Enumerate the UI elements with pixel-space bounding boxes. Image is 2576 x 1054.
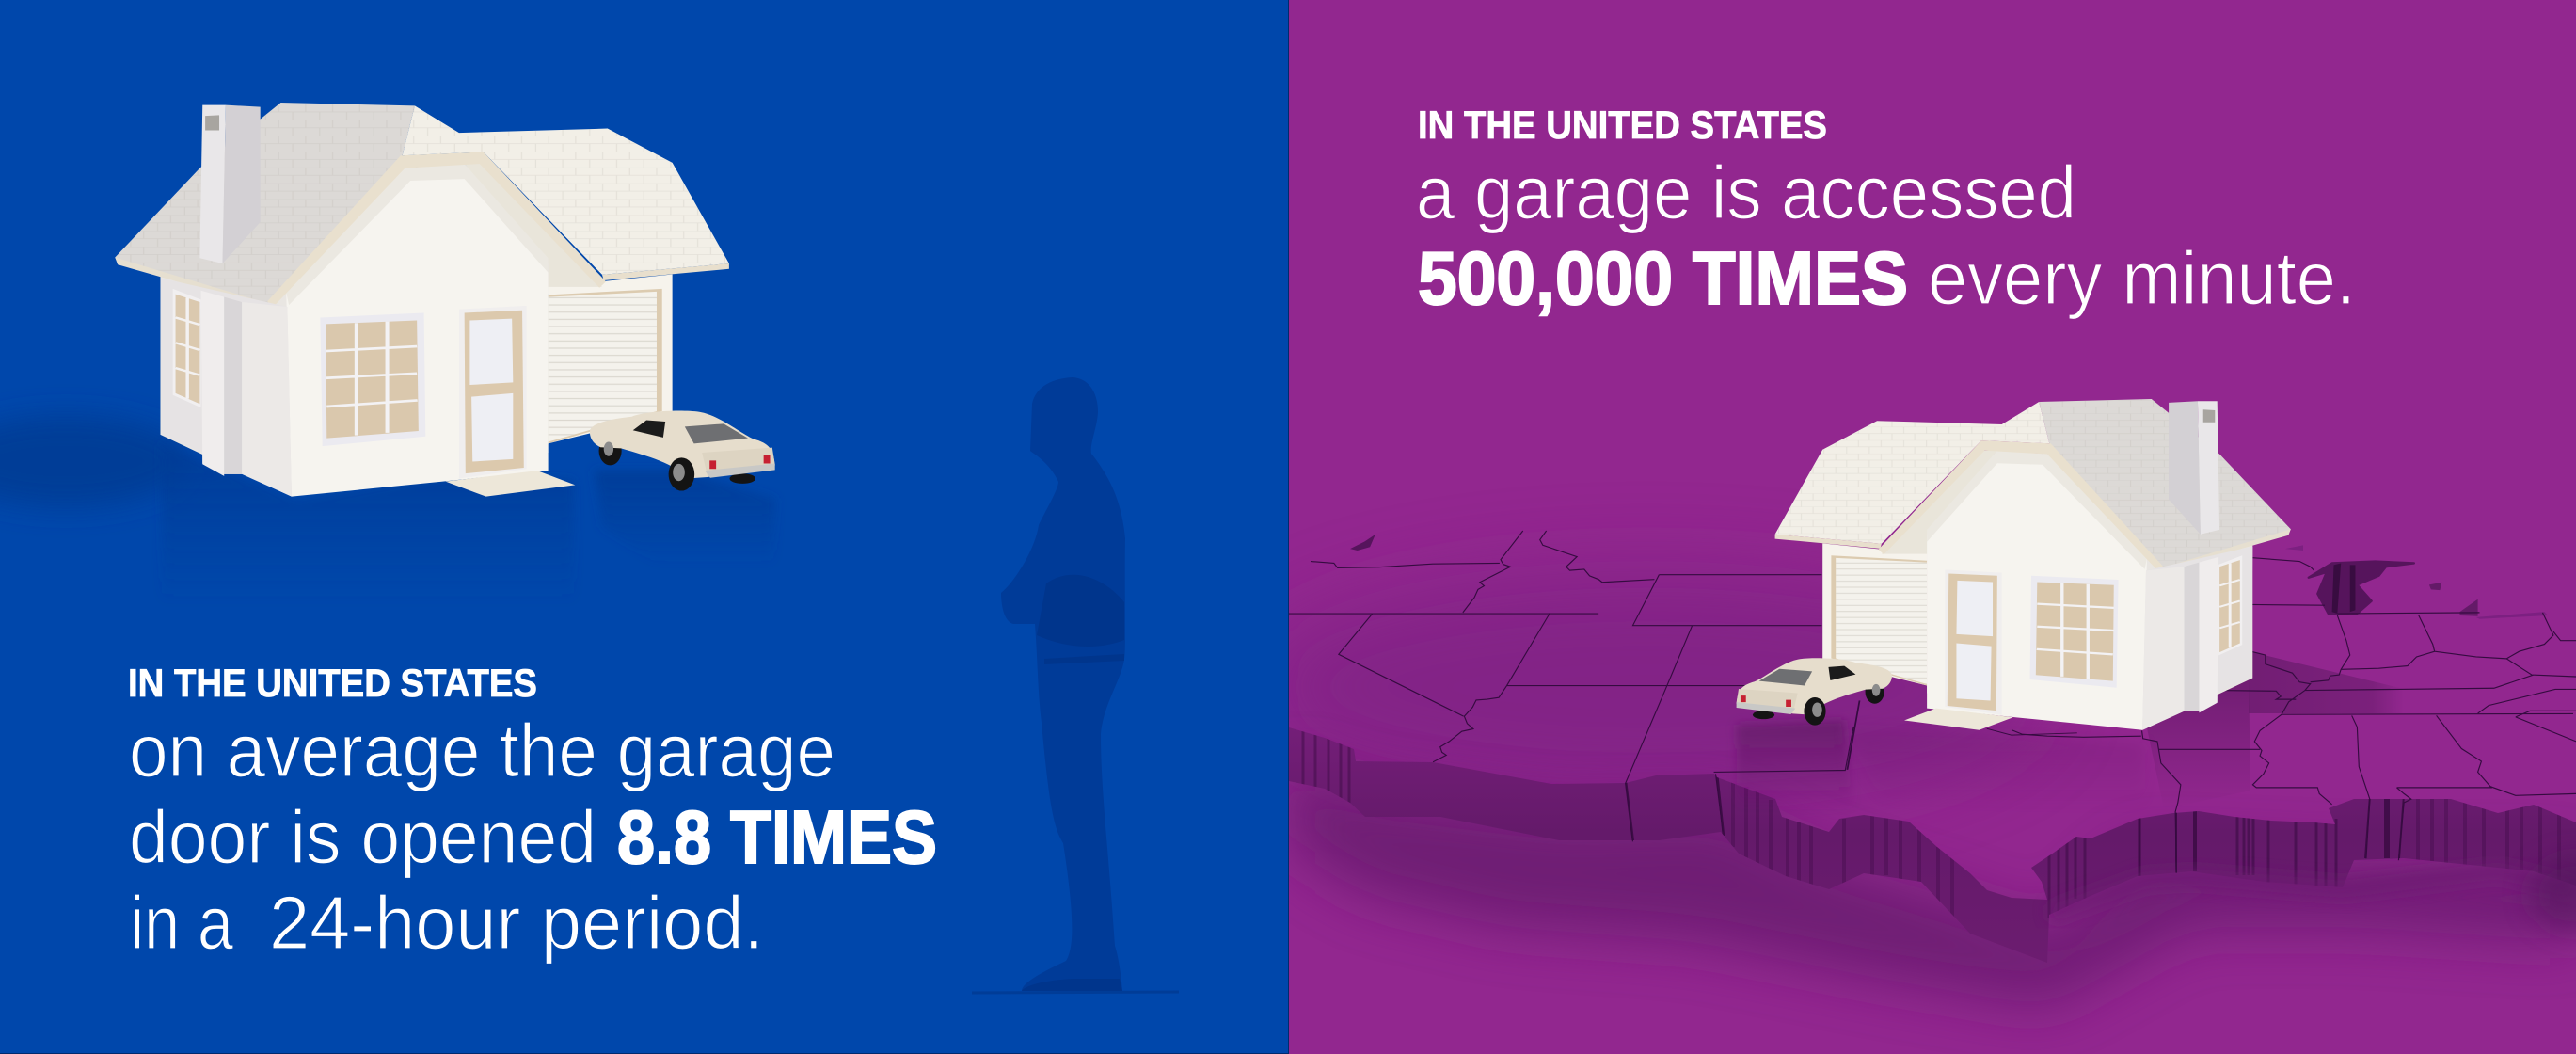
map: extruded United States [1251,531,2576,1007]
statement line 2: every minute. [1928,236,2356,320]
garage wall and roller door [549,275,673,443]
panel: blue left background [0,0,1288,1054]
illustration: mirrored model house with car on the map [1737,399,2291,730]
wall backing [160,165,608,497]
front door [459,306,527,479]
state borders east [2012,558,2576,873]
house shadows on map [1737,651,2404,809]
statement line 1: a garage is accessed [1416,151,2076,234]
statement line 2: 500,000 TIMES [1418,236,1908,320]
statement line 2: 8.8 TIMES [617,795,937,879]
front window [320,312,425,446]
state borders west [1289,531,1853,841]
left side window [173,289,201,407]
statement line 2 [1418,236,2356,320]
left side wall and column [160,278,292,497]
map drop shadow [1289,762,2576,1007]
front wall [286,164,549,497]
illustration: paper model house with car [115,103,775,497]
silhouette: man with folded arms looking at the house [972,377,1179,993]
door step [446,471,575,497]
ground shadow and reflection under left house [0,416,775,602]
statement line 2: door is opened [129,795,596,879]
eyebrow: in the United States: IN THE UNITED STATES [1418,103,1827,147]
garage roof [403,105,729,280]
statement line 3: in a [130,881,233,965]
lakes [2285,545,2548,619]
statement line 2 [129,795,937,879]
map surface shading [1289,578,1999,783]
statement line 1: on average the garage [129,709,835,792]
map walls [1289,725,2576,963]
main roof slope [115,103,415,308]
text: left statement [128,661,937,965]
roof gable trim [267,152,606,308]
chimney [199,105,261,264]
panel: purple right background [1289,0,2576,1054]
toy car [590,411,775,491]
state borders central [1847,700,2077,770]
statement line 3: 24-hour period. [269,881,764,965]
eyebrow: in the United States: IN THE UNITED STATES [128,661,537,705]
under eave shade [465,164,602,287]
text: right statement [1416,103,2356,320]
